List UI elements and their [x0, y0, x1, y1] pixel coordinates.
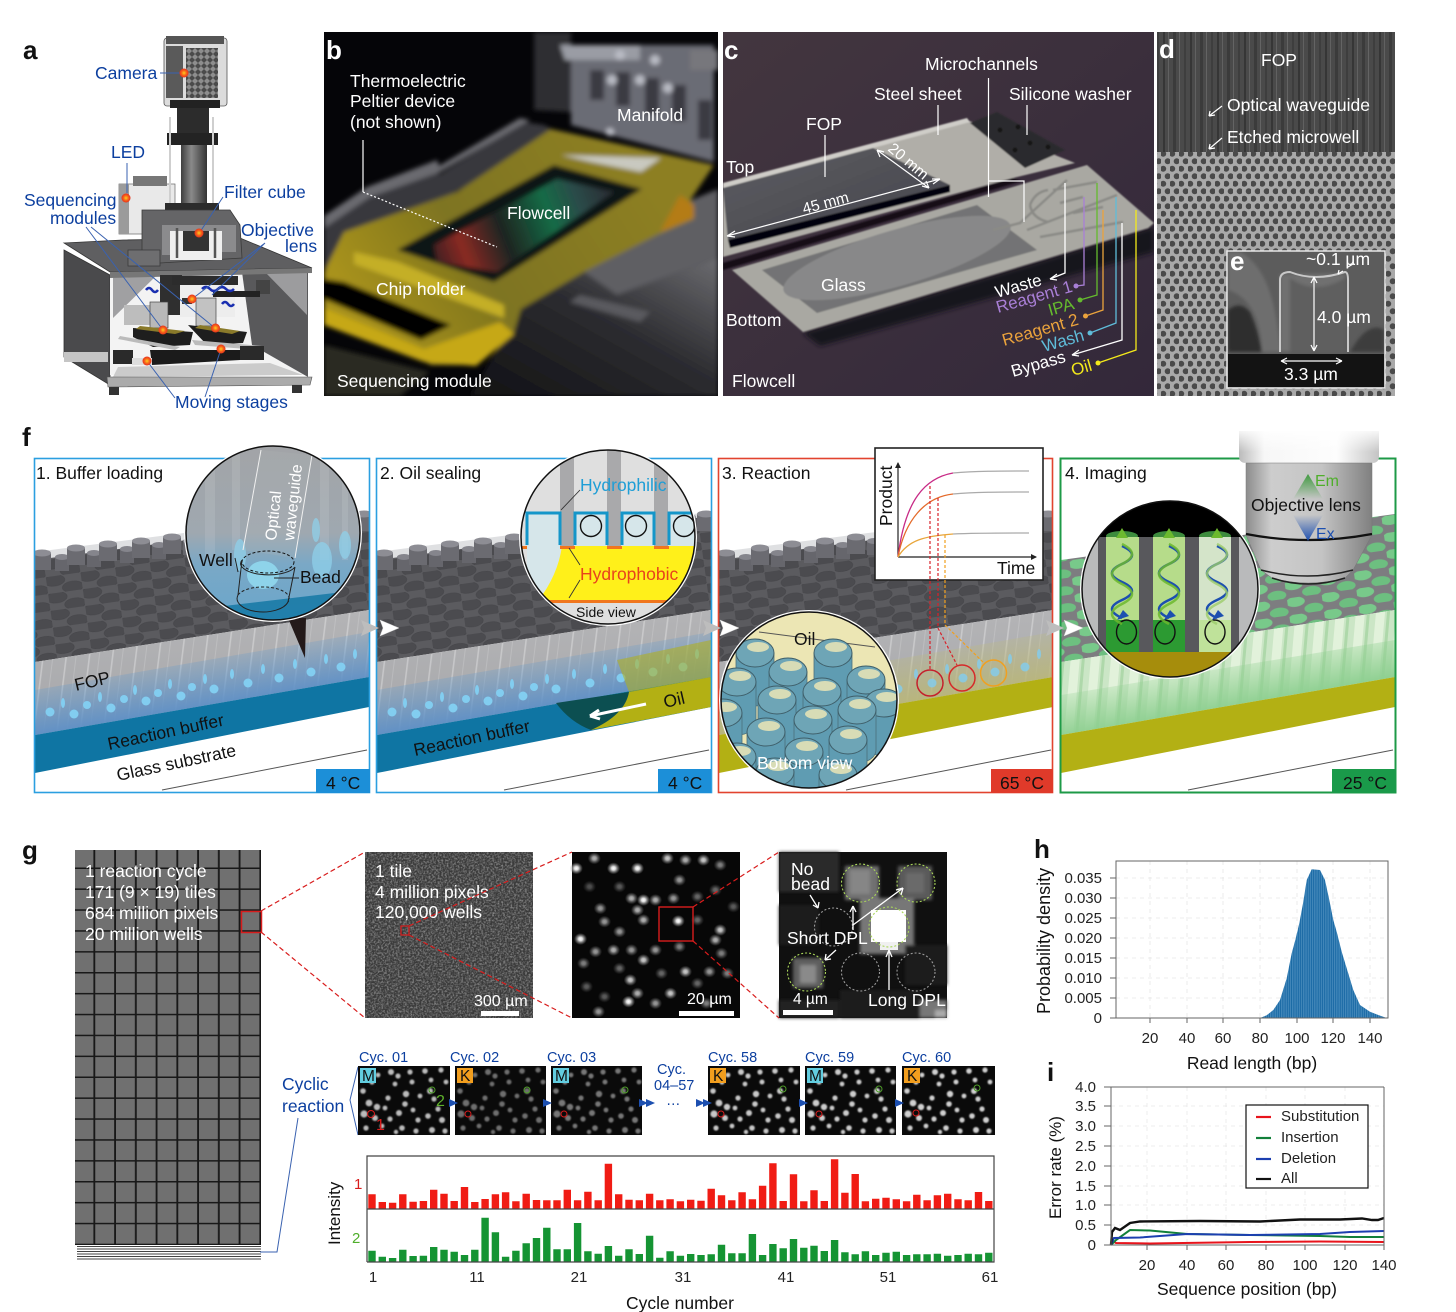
panel letter c: c	[724, 35, 738, 65]
temperature badge: 4 °C	[668, 773, 702, 793]
tick labels: 100	[1292, 1257, 1318, 1274]
image: full reaction cycle tile grid: 20 million wells	[85, 924, 203, 944]
dimension arrows	[727, 150, 940, 237]
arrows between steps	[361, 620, 1083, 636]
labels: Reagent 2	[1000, 310, 1081, 350]
frame	[1060, 458, 1396, 792]
histogram	[1258, 865, 1388, 1019]
magnifier: bottom view: Oil	[794, 629, 815, 649]
tick labels: 80	[1252, 1030, 1268, 1047]
image: full reaction cycle tile grid: 171 (9 × 19) tiles	[85, 882, 216, 902]
axis labels: 31	[675, 1269, 691, 1286]
panel i: error rate chart	[1046, 1057, 1397, 1299]
axis titles	[1046, 1116, 1337, 1299]
scene labels: Glass substrate	[115, 740, 238, 785]
micrograph shapes	[1228, 252, 1384, 388]
cycle 01: Cyc. 01	[359, 1050, 408, 1066]
tick labels: 80	[1258, 1257, 1274, 1274]
cycle 60: Cyc. 60	[902, 1050, 951, 1066]
panel letter e: e	[1230, 246, 1244, 276]
labels: Steel sheet	[874, 84, 962, 104]
LED housing	[119, 176, 175, 234]
inset kinetics chart: Time	[997, 558, 1035, 578]
grid lines	[1116, 861, 1388, 1018]
labels: Bypass	[1009, 347, 1068, 381]
labels: Peltier device	[350, 91, 455, 111]
white leader lines	[825, 78, 1027, 222]
axis labels: 21	[571, 1269, 587, 1286]
tick labels: 40	[1179, 1257, 1195, 1274]
labels: IPA	[1046, 294, 1077, 320]
Peltier dotted line	[363, 192, 497, 247]
panel f4: imaging	[1060, 430, 1396, 793]
frame and ticks	[1104, 1087, 1384, 1250]
labels: (not shown)	[350, 112, 441, 132]
oil front arrow	[590, 704, 646, 719]
cycle 01	[358, 1050, 450, 1135]
temperature badge: 65 °C	[1000, 773, 1044, 793]
labels: Filter cube	[224, 182, 306, 202]
tick labels: 2.0	[1075, 1158, 1096, 1175]
green series well 2	[372, 1218, 989, 1262]
axis titles: Error rate (%)	[1046, 1116, 1065, 1219]
labels: Bottom	[726, 310, 781, 330]
step title: 2. Oil sealing	[380, 463, 481, 483]
cycles 04–57 label: Cyc.	[657, 1062, 686, 1078]
zoom guides	[261, 852, 779, 1018]
frame	[34, 458, 370, 792]
cycle 01: 2	[436, 1093, 445, 1110]
frame	[376, 458, 712, 792]
cycle 58	[708, 1050, 800, 1135]
marker dots	[122, 68, 226, 366]
labels: Chip holder	[376, 279, 466, 299]
image: full reaction cycle tile grid: 1 reaction cycle	[85, 861, 207, 881]
magnifier: side view: Hydrophobic	[580, 564, 678, 584]
scene labels: Reaction buffer	[106, 710, 226, 754]
magnifier: bottom view: Bottom view	[757, 753, 853, 773]
image: single tile: 300 µm	[474, 993, 528, 1010]
panel c: flowcell photo	[723, 32, 1154, 396]
axis labels: 51	[880, 1269, 896, 1286]
inset kinetics chart	[875, 448, 1043, 580]
tick labels: 120	[1320, 1030, 1346, 1047]
panel h: read length histogram	[1034, 834, 1388, 1073]
temperature badge: 25 °C	[1343, 773, 1387, 793]
legend: Substitution	[1281, 1108, 1359, 1125]
step title: 3. Reaction	[722, 463, 811, 483]
magnifier: bottom view	[719, 610, 899, 789]
tick labels: 0.020	[1064, 930, 1102, 947]
image: pixel-level well view: Long DPL	[868, 990, 946, 1010]
tick labels: 4.0	[1075, 1079, 1096, 1096]
red series well 1	[372, 1159, 989, 1209]
tick labels: 0.005	[1064, 990, 1102, 1007]
tick labels: 3.0	[1075, 1118, 1096, 1135]
legend	[1246, 1105, 1368, 1188]
panel a: instrument rendering	[23, 35, 317, 412]
labels and arrows	[1209, 50, 1370, 149]
image: single tile: 120,000 wells	[375, 902, 482, 922]
labels: Glass	[821, 275, 866, 295]
cycle 02: Cyc. 02	[450, 1050, 499, 1066]
image: full reaction cycle tile grid: 684 million pixels	[85, 903, 219, 923]
scene	[33, 510, 373, 790]
cycle 58: Cyc. 58	[708, 1050, 757, 1066]
cycle 58: K	[713, 1068, 724, 1085]
axis labels: 41	[778, 1269, 794, 1286]
coloured channel leaders	[1050, 183, 1136, 363]
cycle 60: K	[907, 1068, 918, 1085]
labels: Wash	[1040, 326, 1086, 356]
cycle 60	[902, 1050, 995, 1135]
image: single tile: 1 tile	[375, 861, 412, 881]
magnifier: well and bead: Optical	[263, 490, 285, 541]
labels: modules	[50, 208, 116, 228]
leader lines	[86, 73, 265, 398]
scene labels	[412, 688, 687, 760]
legend: Deletion	[1281, 1150, 1336, 1167]
axis labels	[325, 1176, 998, 1312]
panel g: letter: g	[22, 835, 38, 865]
magnifier: wells with emission	[1080, 499, 1260, 682]
panel letter d: d	[1159, 34, 1175, 64]
cycles 04–57 label: …	[666, 1093, 680, 1109]
labels: Flowcell	[732, 371, 795, 391]
axis labels: 11	[469, 1269, 485, 1286]
temperature badge	[1332, 769, 1396, 793]
chart frame	[367, 1156, 994, 1262]
axis labels: 1	[369, 1269, 377, 1286]
well markers	[917, 660, 1006, 696]
tick labels: 120	[1332, 1257, 1358, 1274]
labels	[337, 71, 683, 391]
objective lens	[1238, 430, 1380, 584]
labels: Flowcell	[507, 203, 570, 223]
panel f2: oil sealing	[375, 448, 715, 793]
tick labels: 1.5	[1075, 1178, 1096, 1195]
cycle 03: Cyc. 03	[547, 1050, 596, 1066]
axis labels: 61	[982, 1269, 998, 1286]
labels: Manifold	[617, 105, 683, 125]
labels: Silicone washer	[1009, 84, 1132, 104]
cycle image strip	[358, 1050, 995, 1135]
magnifier: side view: Hydrophilic	[580, 475, 667, 495]
objective lens: Ex	[1316, 526, 1335, 543]
labels: Reagent 1	[994, 277, 1075, 317]
image: single tile	[365, 852, 533, 1018]
labels: Top	[726, 157, 754, 177]
waveguide stripes	[1157, 32, 1395, 152]
temperature badge	[316, 769, 370, 793]
tick labels: 0.035	[1064, 870, 1102, 887]
tick labels: 20	[1142, 1030, 1158, 1047]
temperature badge	[991, 769, 1053, 793]
tick labels: 0	[1088, 1237, 1096, 1254]
scene	[1062, 514, 1394, 790]
Peltier leader line	[362, 140, 364, 192]
labels and arrows: Optical waveguide	[1227, 95, 1370, 115]
magnifier: well and bead	[184, 444, 362, 625]
leader end dots	[1050, 274, 1100, 366]
scene	[375, 510, 715, 790]
labels: Waste	[993, 270, 1044, 302]
panel letter b: b	[326, 35, 342, 65]
step title: 1. Buffer loading	[36, 463, 163, 483]
camera	[164, 36, 227, 108]
legend: All	[1281, 1170, 1298, 1187]
image: pixel-level well view: bead	[791, 874, 830, 894]
labels and arrows: Etched microwell	[1227, 127, 1359, 147]
cycle 02: K	[460, 1068, 471, 1085]
enclosure box	[64, 238, 312, 395]
scene labels: Oil	[661, 688, 687, 712]
cycle 59	[805, 1050, 896, 1135]
axis titles: Read length (bp)	[1187, 1053, 1317, 1073]
panel d: FOP micrograph	[1157, 32, 1395, 396]
labels: Sequencing module	[337, 371, 492, 391]
tick labels	[1075, 1079, 1397, 1274]
cycle 03	[547, 1050, 642, 1135]
cycle arrows	[449, 1099, 904, 1107]
tick labels: 20	[1139, 1257, 1155, 1274]
cycles 04–57 label: 04–57	[654, 1078, 694, 1094]
tick labels: 0	[1094, 1010, 1102, 1027]
dashed guide lines	[930, 486, 985, 670]
cycle 01: 1	[376, 1117, 385, 1134]
cyclic reaction label: reaction	[282, 1096, 344, 1116]
photo background	[723, 32, 1154, 396]
axis titles: Sequence position (bp)	[1157, 1279, 1337, 1299]
panel f1: buffer loading	[33, 444, 373, 793]
tick labels	[1064, 870, 1383, 1047]
axis titles: Probability density	[1034, 868, 1054, 1014]
labels: Sequencing	[24, 190, 116, 210]
tick labels: 140	[1371, 1257, 1397, 1274]
objective lens: Em	[1315, 473, 1339, 490]
cycle 03: M	[555, 1068, 568, 1085]
tick labels: 3.5	[1075, 1098, 1096, 1115]
legend: Insertion	[1281, 1129, 1339, 1146]
scene labels	[72, 667, 238, 785]
dimension arrows	[1281, 264, 1353, 364]
cycle 01: M	[362, 1068, 375, 1085]
grid lines	[1111, 1087, 1384, 1245]
tick labels: 1.0	[1075, 1197, 1096, 1214]
image: bead field: 20 µm	[687, 991, 732, 1008]
magnifier: side view: Side view	[576, 604, 637, 620]
tick labels: 60	[1218, 1257, 1234, 1274]
cycle 59: M	[809, 1068, 822, 1085]
image: pixel-level well view: No	[791, 859, 813, 879]
magnifier: well and bead: Well	[199, 550, 233, 570]
scene labels: FOP	[72, 667, 112, 695]
tick labels: 0.025	[1064, 910, 1102, 927]
inset kinetics chart: Product	[876, 466, 896, 526]
labels: Microchannels	[925, 54, 1038, 74]
labels: Moving stages	[175, 392, 288, 412]
magnifier: well and bead: waveguide	[281, 463, 306, 542]
tick labels: 40	[1179, 1030, 1195, 1047]
axis labels: 2	[352, 1230, 360, 1247]
cycle 59: Cyc. 59	[805, 1050, 854, 1066]
cyclic reaction label	[260, 1067, 358, 1252]
tick labels: 100	[1284, 1030, 1310, 1047]
labels: FOP	[806, 114, 842, 134]
axis labels: Intensity	[325, 1181, 344, 1245]
intensity bar chart	[325, 1156, 998, 1312]
tick labels: 140	[1357, 1030, 1383, 1047]
labels: Thermoelectric	[350, 71, 466, 91]
error curves	[1111, 1218, 1384, 1245]
labels	[1284, 249, 1371, 384]
image: pixel-level well view: 4 µm	[793, 991, 828, 1008]
objective lens: Objective lens	[1251, 495, 1361, 515]
etched microwell honeycomb	[1157, 152, 1395, 396]
panel f3: reaction	[718, 447, 1054, 794]
photo background	[324, 32, 718, 396]
panel b: sequencing module photo	[324, 32, 718, 396]
image: pixel-level well view: Short DPL	[787, 928, 868, 948]
labels: 3.3 µm	[1284, 364, 1338, 384]
panel letter h: h	[1034, 834, 1050, 864]
tick labels: 0.010	[1064, 970, 1102, 987]
microscope column and filter cube arch	[128, 107, 242, 266]
tick labels: 60	[1215, 1030, 1231, 1047]
image: bead field	[570, 852, 740, 1018]
scene labels: Reaction buffer	[412, 716, 532, 760]
tick labels: 0.015	[1064, 950, 1102, 967]
panel letter a: a	[23, 35, 38, 65]
magnifier: side view	[519, 448, 699, 626]
axis titles	[1034, 868, 1317, 1073]
step title: 4. Imaging	[1065, 463, 1147, 483]
panel f heading letter: f	[22, 422, 31, 452]
labels: LED	[111, 142, 145, 162]
pointer wedge	[288, 618, 306, 658]
frame and ticks	[1110, 861, 1388, 1023]
image: single tile: 4 million pixels	[375, 882, 489, 902]
cyclic reaction label: Cyclic	[282, 1074, 329, 1094]
labels: Oil	[1069, 356, 1094, 380]
frame	[718, 458, 1052, 792]
image: full reaction cycle tile grid	[75, 850, 262, 1259]
labels: lens	[285, 236, 317, 256]
panel e: well cross-section inset	[1227, 246, 1385, 388]
labels: Camera	[95, 63, 158, 83]
tick labels: 2.5	[1075, 1138, 1096, 1155]
temperature badge	[658, 769, 711, 793]
tick labels: 0.5	[1075, 1217, 1096, 1234]
labels and arrows: FOP	[1261, 50, 1297, 70]
panel letter i: i	[1047, 1057, 1054, 1087]
labels: 4.0 µm	[1317, 307, 1371, 327]
magnifier: well and bead: Bead	[300, 567, 341, 587]
image: pixel-level well view	[779, 852, 947, 1018]
scene	[717, 510, 1057, 790]
cycles 04–57 label	[654, 1062, 694, 1109]
temperature badge: 4 °C	[326, 773, 360, 793]
labels	[726, 54, 1132, 391]
labels: 45 mm	[801, 189, 851, 218]
tick labels: 0.030	[1064, 890, 1102, 907]
labels: Objective	[241, 220, 314, 240]
cycle 02	[450, 1050, 546, 1135]
axis labels: 1	[354, 1176, 362, 1193]
labels: ~0.1 µm	[1306, 249, 1370, 269]
labels	[24, 63, 317, 412]
labels: 20 mm	[884, 140, 932, 184]
